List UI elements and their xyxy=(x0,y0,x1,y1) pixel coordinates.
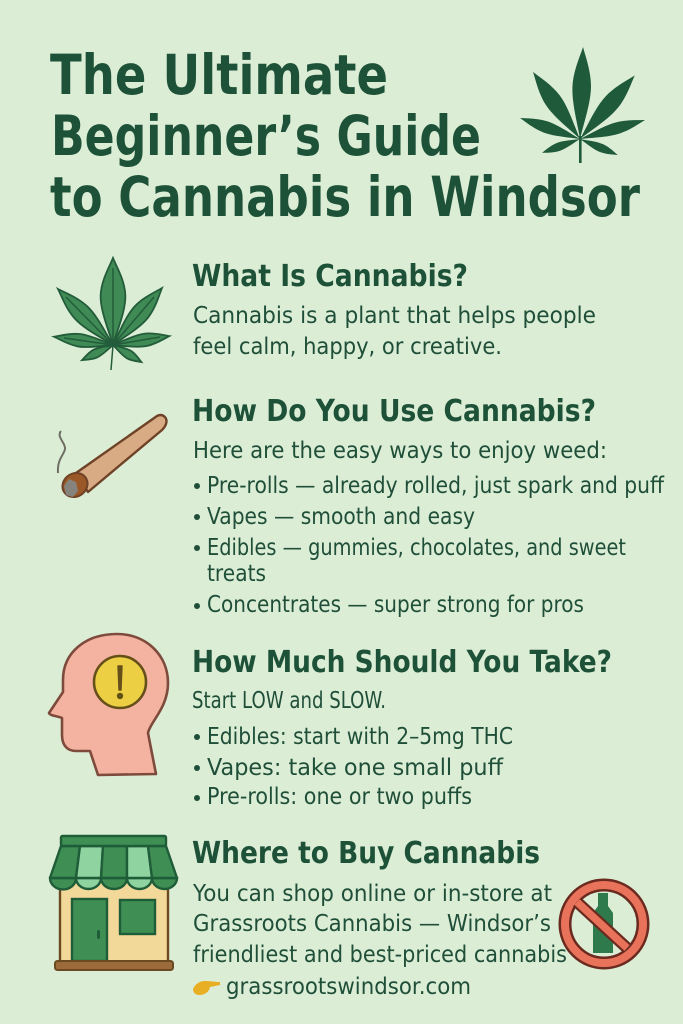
title: Beginner’s Guide xyxy=(51,104,481,168)
title: The Ultimate xyxy=(50,43,388,107)
icon: pointing hand xyxy=(193,981,220,995)
bullet list xyxy=(194,724,513,810)
body text xyxy=(193,303,596,360)
bullet list: treats xyxy=(207,561,266,587)
heading: What Is Cannabis? xyxy=(192,259,468,294)
heading: Where to Buy Cannabis xyxy=(192,836,540,871)
bullet list xyxy=(194,473,665,618)
panel: what is cannabis xyxy=(52,258,596,370)
bullet list: Pre-rolls: one or two puffs xyxy=(207,784,472,810)
bullet list: Vapes: take one small puff xyxy=(207,755,504,781)
intro text: Start LOW and SLOW. xyxy=(192,688,386,714)
heading: How Do You Use Cannabis? xyxy=(192,394,596,429)
bullet list: Vapes — smooth and easy xyxy=(207,504,475,530)
icon: no alcohol sign xyxy=(565,885,643,963)
icon: storefront xyxy=(50,836,177,970)
body text xyxy=(192,881,567,968)
bullet list: Concentrates — super strong for pros xyxy=(207,592,584,618)
body text: You can shop online or in-store at xyxy=(192,881,552,907)
icon: joint with smoke xyxy=(58,415,166,502)
icon: dark cannabis leaf xyxy=(518,47,647,163)
body text: feel calm, happy, or creative. xyxy=(193,334,502,360)
icon: green cannabis leaf xyxy=(52,258,170,370)
icon: head with warning xyxy=(49,634,168,775)
heading: How Much Should You Take? xyxy=(192,645,612,680)
bullet list: Edibles: start with 2–5mg THC xyxy=(207,724,513,750)
panel: how much should you take xyxy=(49,634,612,810)
panel: how do you use cannabis xyxy=(58,394,665,618)
body text: friendliest and best-priced cannabis xyxy=(193,942,567,968)
body text: Cannabis is a plant that helps people xyxy=(193,303,596,329)
title xyxy=(50,43,640,229)
intro text: Here are the easy ways to enjoy weed: xyxy=(193,438,607,464)
body text: Grassroots Cannabis — Windsor’s xyxy=(193,911,551,937)
website link: grassrootswindsor.com xyxy=(226,974,471,1000)
panel: where to buy cannabis xyxy=(50,836,643,1000)
